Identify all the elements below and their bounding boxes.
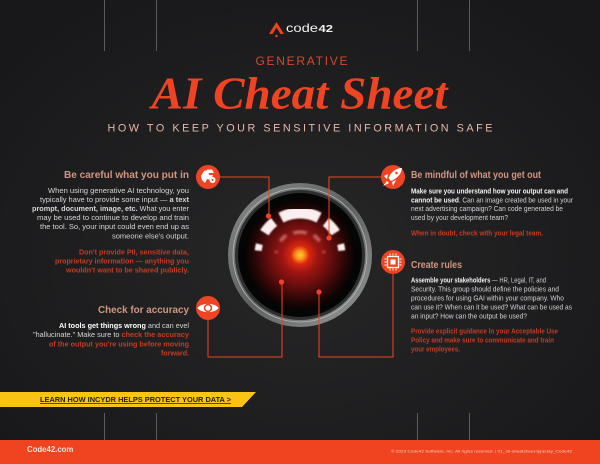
logo: 42 xyxy=(318,23,333,35)
warning text: Policy and make sure to communicate and train xyxy=(411,338,554,344)
body text: may be used to continue to develop and train xyxy=(37,213,189,222)
body text xyxy=(33,321,189,358)
warning text: your employees. xyxy=(411,346,460,354)
hanging lines top xyxy=(104,0,470,51)
body text: forward. xyxy=(161,348,189,358)
lens: red eye xyxy=(228,183,372,327)
heading: Be mindful of what you get out xyxy=(411,170,542,181)
panel: be careful xyxy=(32,170,190,274)
body text: Security. This group should define the policies and xyxy=(411,286,559,294)
icon: rocket xyxy=(381,165,405,189)
title: HOW TO KEEP YOUR SENSITIVE INFORMATION SAFE xyxy=(108,122,492,134)
warning text: proprietary information — anything you xyxy=(55,256,189,266)
logo: code xyxy=(286,21,318,35)
connector lines xyxy=(208,177,393,357)
panel: check for accuracy xyxy=(33,305,189,358)
title xyxy=(108,54,492,134)
banner: call to action xyxy=(0,392,256,407)
body text: someone else's output. xyxy=(112,232,189,240)
body text: Make sure you understand how your output can and xyxy=(411,188,568,196)
body text: of the output you're using before moving xyxy=(49,340,189,348)
panel: create rules xyxy=(411,260,573,354)
warning text: Don't provide PII, sensitive data, xyxy=(79,248,189,256)
body text: prompt, document, image, etc. What you enter xyxy=(32,204,190,213)
logo xyxy=(269,21,333,37)
body text: "hallucinate." Make sure to check the accuracy xyxy=(33,330,189,339)
body text: When using generative AI technology, you xyxy=(48,186,189,195)
body text xyxy=(411,278,573,320)
warning text xyxy=(55,248,189,274)
body text: the tool. So, your input could even end up as xyxy=(40,222,189,231)
warning text xyxy=(411,328,558,354)
body text: AI tools get things wrong and can evel xyxy=(59,321,189,330)
heading: Create rules xyxy=(411,260,462,271)
title: GENERATIVE xyxy=(256,54,348,68)
icon: brain and gears xyxy=(196,165,220,189)
body text: procedures for using GAI within your company. Who xyxy=(411,296,564,302)
body text xyxy=(32,186,190,240)
footer: Code42.com xyxy=(27,445,73,454)
body text: Assemble your stakeholders — HR, Legal, IT, and xyxy=(411,278,546,284)
hanging lines bottom xyxy=(104,413,470,440)
warning text: wouldn't want to be shared publicly. xyxy=(65,266,189,274)
footer xyxy=(0,440,600,464)
panel: be mindful xyxy=(411,170,574,238)
connector dots xyxy=(266,213,332,295)
banner: call to action: LEARN HOW INCYDR HELPS PROTECT YOUR DATA > xyxy=(40,395,232,404)
warning text: Provide explicit guidance in your Acceptable Use xyxy=(411,328,558,336)
body text: next advertising campaign? Can code generated be xyxy=(411,206,563,213)
heading: Check for accuracy xyxy=(98,305,189,316)
body text xyxy=(411,188,574,222)
warning text: When in doubt, check with your legal team. xyxy=(411,230,543,238)
body text: used by your development team? xyxy=(411,215,508,222)
icon: eye xyxy=(196,296,220,320)
body text: typically have to provide some input — a text xyxy=(40,195,190,204)
body text: an input? How can the output be used? xyxy=(411,314,527,320)
body text: cannot be used. Can an image created be used in your xyxy=(411,198,574,204)
title: AI Cheat Sheet xyxy=(148,68,449,118)
heading: Be careful what you put in xyxy=(64,170,189,181)
body text: can use it? When can it be used? What can be used as xyxy=(411,304,573,312)
icon: chip xyxy=(381,250,405,274)
footer: © 2023 Code42 Software, Inc. All rights reserved. | 01_GI-sheatsheet-typeday_Code42 xyxy=(391,448,573,454)
